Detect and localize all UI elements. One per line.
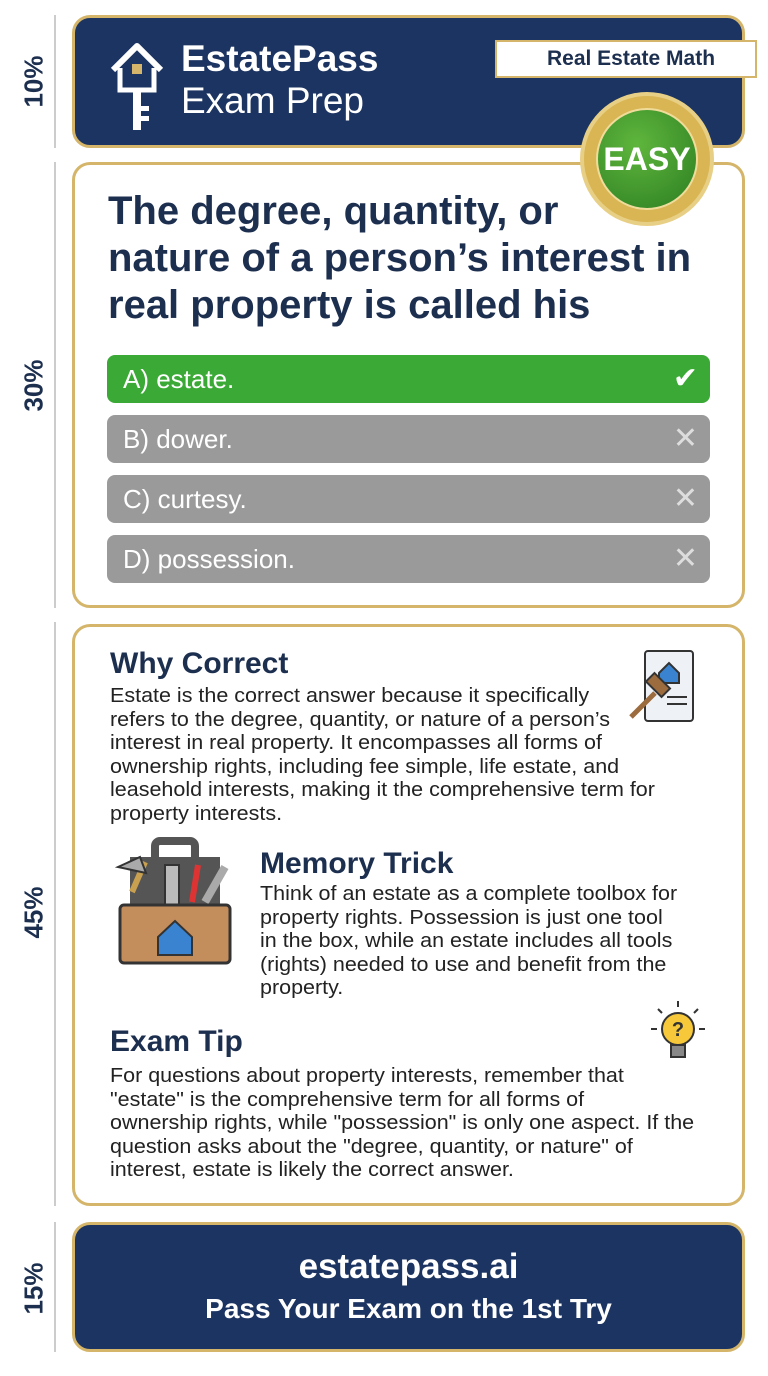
option A correct: ✔ <box>673 362 698 395</box>
icon: toolbox <box>115 837 232 964</box>
text: exam tip: For questions about property interests, remember that <box>110 1065 624 1087</box>
text: exam tip: ownership rights, while "possession" is only one aspect. If the <box>110 1112 694 1134</box>
badge: EASY: EASY <box>603 141 691 177</box>
ruler: 15% <box>18 1262 48 1315</box>
ruler <box>18 15 56 1352</box>
option D <box>107 535 710 583</box>
option D: D) possession. <box>123 544 295 574</box>
text: why correct <box>110 685 655 825</box>
text: why correct: interest in real property. It encompasses all forms of <box>110 732 602 754</box>
text: memory trick: (rights) needed to use and benefit from the <box>260 954 666 976</box>
text: exam tip: "estate" is the comprehensive term for all forms of <box>110 1089 584 1111</box>
question card <box>72 162 745 608</box>
footer tagline: Pass Your Exam on the 1st Try <box>205 1293 612 1324</box>
text: memory trick <box>260 883 677 999</box>
badge: EASY <box>584 96 710 222</box>
text: exam tip <box>110 1065 694 1181</box>
ruler: 10% <box>18 55 48 108</box>
header panel <box>72 15 745 148</box>
heading: exam tip: Exam Tip <box>110 1025 243 1058</box>
option B: ✕ <box>673 422 698 455</box>
icon: house key <box>110 43 164 130</box>
heading: memory trick: Memory Trick <box>260 847 453 880</box>
text: why correct: leasehold interests, making it the comprehensive term for <box>110 779 655 801</box>
question text: The degree, quantity, or <box>108 189 558 233</box>
question text <box>108 189 691 327</box>
question text: nature of a person’s interest in <box>108 236 691 280</box>
icon: gavel and deed <box>629 650 694 722</box>
option B <box>107 415 710 463</box>
logo text <box>181 38 378 121</box>
text: why correct: property interests. <box>110 803 282 825</box>
option D: ✕ <box>673 542 698 575</box>
footer panel <box>72 1222 745 1352</box>
option C <box>107 475 710 523</box>
icon: lightbulb <box>651 1001 705 1058</box>
logo text: EstatePass <box>181 38 378 79</box>
ribbon: subject <box>495 40 757 78</box>
text: exam tip: interest, estate is likely the correct answer. <box>110 1159 514 1181</box>
ruler: 45% <box>18 886 48 939</box>
text: memory trick: property rights. Possession is just one tool <box>260 907 663 929</box>
text: why correct: refers to the degree, quantity, or nature of a person’s <box>110 709 610 731</box>
text: why correct: Estate is the correct answer because it specifically <box>110 685 589 707</box>
question text: real property is called his <box>108 283 590 327</box>
option C: C) curtesy. <box>123 484 247 514</box>
logo text: Exam Prep <box>181 80 364 121</box>
icon: lightbulb: ? <box>672 1019 684 1041</box>
option A correct <box>107 355 710 403</box>
text: why correct: ownership rights, including fee simple, life estate, and <box>110 756 619 778</box>
text: memory trick: Think of an estate as a complete toolbox for <box>260 883 677 905</box>
ruler: 30% <box>18 359 48 412</box>
explanation card <box>72 624 745 1206</box>
option A correct: A) estate. <box>123 364 234 394</box>
text: exam tip: question asks about the "degree, quantity, or nature" of <box>110 1136 633 1158</box>
text: memory trick: property. <box>260 977 343 999</box>
option C: ✕ <box>673 482 698 515</box>
footer url: estatepass.ai <box>299 1247 518 1286</box>
heading: why correct: Why Correct <box>110 647 288 680</box>
option B: B) dower. <box>123 424 233 454</box>
ribbon: subject: Real Estate Math <box>547 47 715 70</box>
text: memory trick: in the box, while an estate includes all tools <box>260 930 672 952</box>
